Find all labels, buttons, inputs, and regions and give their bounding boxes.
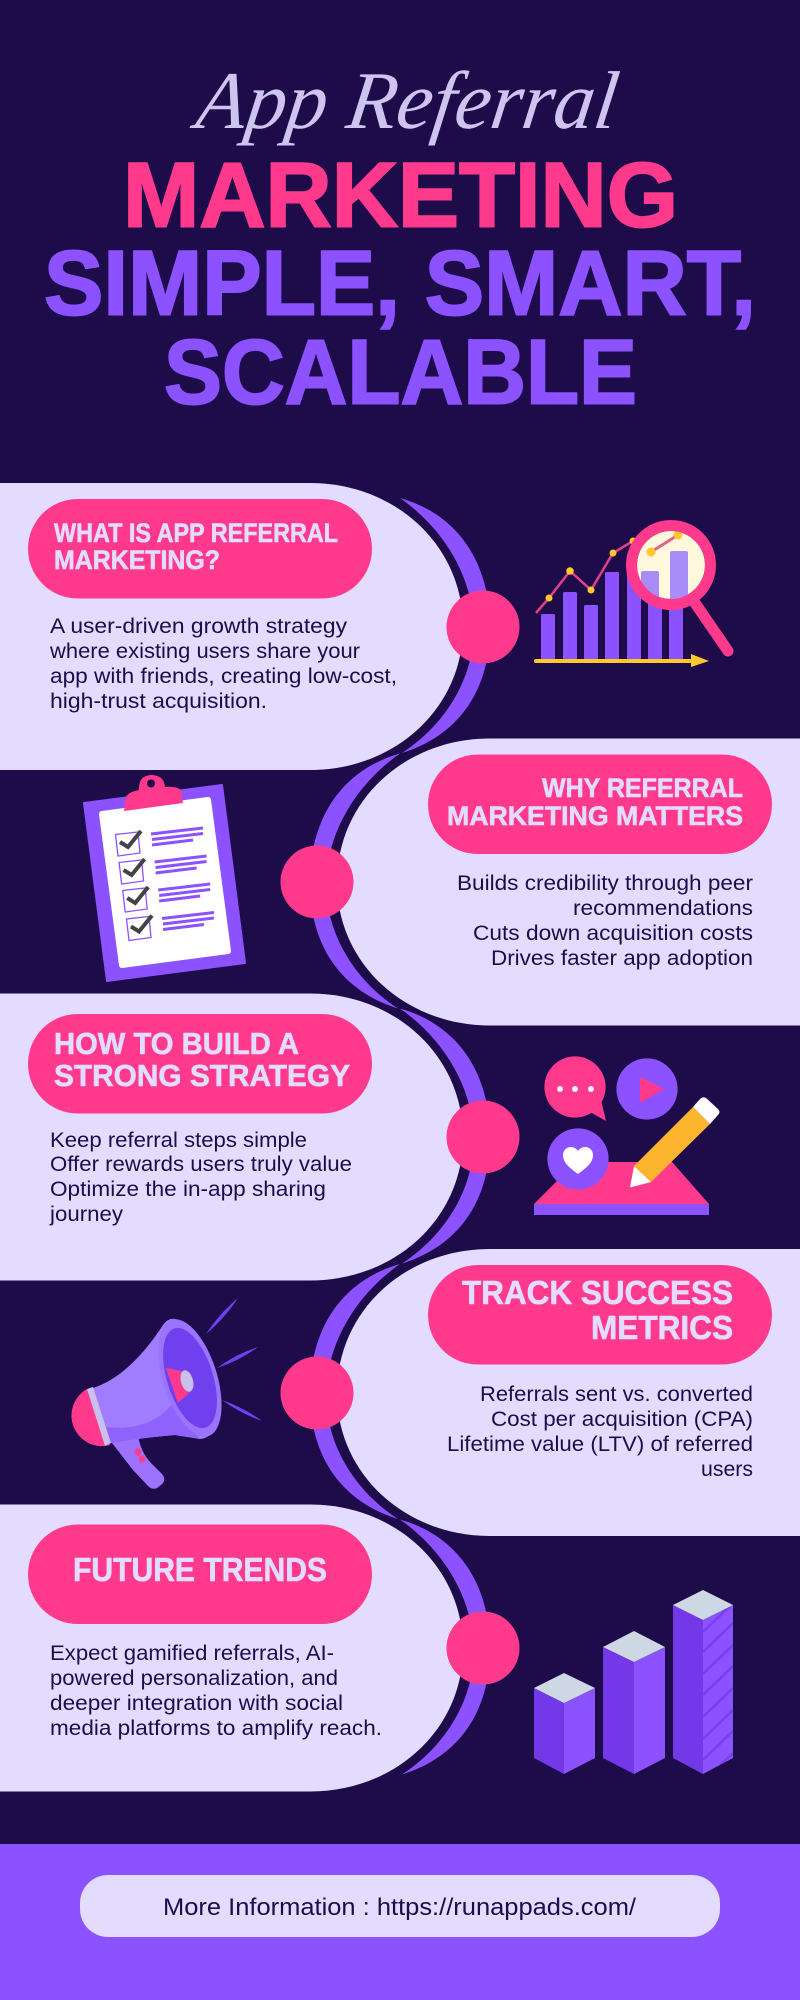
heading: MARKETING MATTERS [447, 801, 743, 831]
heading [447, 773, 743, 831]
node circle [446, 1612, 520, 1684]
body text: Builds credibility through peer [457, 872, 753, 895]
panel: what is app referral marketing [0, 483, 520, 770]
crescent accent [400, 1008, 490, 1264]
panel: how to build a strong strategy [0, 994, 520, 1280]
title line: simple, smart: SIMPLE, SMART, [44, 232, 756, 334]
heading [462, 1274, 733, 1346]
heading [54, 518, 338, 575]
body text: Referrals sent vs. converted [480, 1383, 753, 1406]
heading: HOW TO BUILD A [54, 1027, 299, 1061]
body text: powered personalization, and [50, 1667, 338, 1690]
heading pill [428, 754, 772, 854]
crescent accent [400, 1520, 490, 1774]
panel: why referral marketing matters [280, 738, 800, 1026]
heading [54, 1027, 350, 1093]
title [44, 55, 756, 424]
body text: Cost per acquisition (CPA) [491, 1408, 753, 1431]
node circle [280, 846, 354, 918]
body text: Expect gamified referrals, AI- [50, 1642, 334, 1665]
panel: future trends [0, 1504, 520, 1792]
heading: WHY REFERRAL [542, 773, 743, 803]
panel background [337, 738, 800, 1026]
heading pill [28, 1014, 372, 1114]
crescent accent [310, 1264, 400, 1519]
heading: MARKETING? [54, 545, 220, 575]
body text: Lifetime value (LTV) of referred [447, 1433, 753, 1456]
icon: social media and pencil [534, 1056, 720, 1215]
heading: METRICS [591, 1309, 733, 1346]
title line: marketing: MARKETING [123, 144, 678, 246]
panel background [0, 483, 463, 770]
body text [447, 1383, 753, 1481]
heading: WHAT IS APP REFERRAL [54, 518, 338, 548]
footer text: More Information : https://runappads.com/ [163, 1894, 636, 1921]
panel background [337, 1249, 800, 1536]
heading pill [428, 1265, 772, 1364]
heading: FUTURE TRENDS [73, 1551, 327, 1588]
crescent accent [310, 754, 400, 1008]
body text: where existing users share your [49, 640, 360, 663]
footer band [0, 1844, 800, 2000]
body text: recommendations [573, 897, 753, 920]
panel background [0, 994, 463, 1280]
node circle [280, 1356, 354, 1430]
body text: Keep referral steps simple [50, 1129, 307, 1152]
body text: journey [49, 1203, 124, 1226]
body text: Drives faster app adoption [491, 947, 753, 970]
body text [457, 872, 753, 970]
body text: Offer rewards users truly value [50, 1153, 352, 1176]
panel: track success metrics [280, 1249, 800, 1536]
footer link pill [80, 1875, 720, 1937]
panel background [0, 1504, 463, 1792]
body text [50, 1642, 382, 1740]
node circle [446, 1100, 520, 1174]
body text: Optimize the in-app sharing [50, 1178, 326, 1201]
body text: users [701, 1458, 753, 1481]
body text: A user-driven growth strategy [50, 615, 348, 638]
icon: bar chart with magnifier [534, 526, 728, 667]
script title line: App Referral [187, 55, 624, 146]
icon: megaphone [71, 1298, 262, 1489]
icon: 3d bar chart [534, 1590, 733, 1782]
node circle [446, 590, 520, 664]
heading pill [28, 499, 372, 598]
crescent accent [400, 498, 490, 753]
heading: STRONG STRATEGY [54, 1059, 350, 1093]
body text [49, 1129, 352, 1226]
body text: deeper integration with social [50, 1692, 343, 1715]
body text: Cuts down acquisition costs [473, 922, 753, 945]
title line: scalable: SCALABLE [164, 322, 637, 424]
body text [49, 615, 397, 713]
body text: app with friends, creating low-cost, [50, 665, 397, 688]
body text: media platforms to amplify reach. [50, 1717, 382, 1740]
heading pill [28, 1524, 372, 1624]
icon: clipboard checklist [84, 775, 245, 981]
heading: TRACK SUCCESS [462, 1274, 733, 1311]
body text: high-trust acquisition. [50, 690, 267, 713]
